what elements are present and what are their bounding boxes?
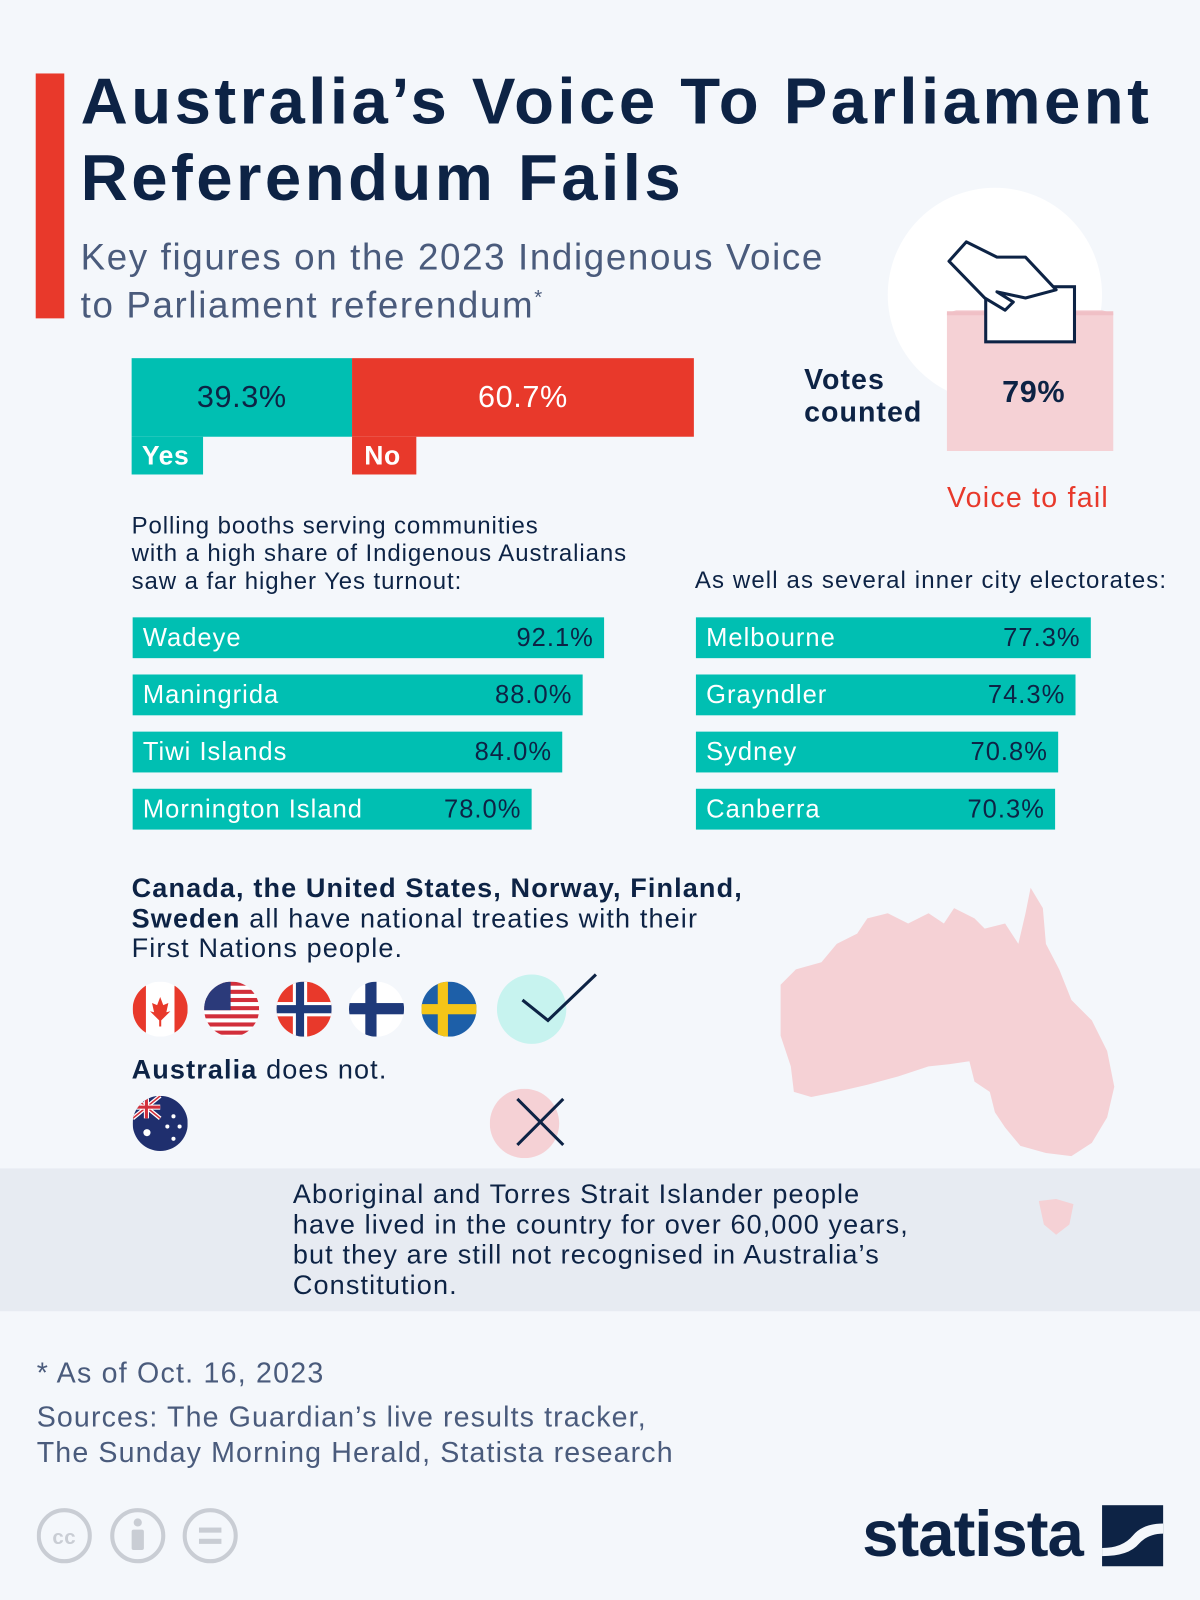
treaties text: Sweden all have national treaties with their <box>132 903 698 933</box>
right bar chart: 74.3% <box>988 681 1065 709</box>
left bar chart: Maningrida <box>143 681 279 709</box>
right bar chart <box>696 617 1091 830</box>
flag: australia <box>132 1096 188 1151</box>
no segment <box>352 358 694 437</box>
right bar chart: Melbourne <box>706 623 836 652</box>
left bar chart: Tiwi Islands <box>143 738 287 766</box>
license icons: cc <box>52 1527 76 1549</box>
sources: The Sunday Morning Herald, Statista research <box>37 1437 674 1468</box>
subtitle: to Parliament referendum* <box>81 284 544 326</box>
ballot box icon <box>946 240 1114 451</box>
polling intro text <box>132 512 627 594</box>
left bar chart: 88.0% <box>495 681 572 709</box>
votes counted label <box>804 363 922 428</box>
left bar chart: Wadeye <box>143 623 242 652</box>
flag: finland <box>349 982 404 1037</box>
yes segment: 39.3% <box>197 381 287 414</box>
tasmania <box>1039 1199 1074 1234</box>
inner city intro text: As well as several inner city electorates: <box>695 566 1167 593</box>
votes counted label: Votes <box>804 363 885 395</box>
sources <box>37 1401 674 1468</box>
sources: Sources: The Guardian’s live results tracker, <box>37 1401 647 1433</box>
left bar chart: 92.1% <box>516 623 594 652</box>
left bar chart: Mornington Island <box>143 795 363 823</box>
left bar chart: 78.0% <box>444 795 521 823</box>
grey band with fact <box>0 1168 1200 1311</box>
footnote: * As of Oct. 16, 2023 <box>37 1357 325 1389</box>
fact text: Constitution. <box>293 1269 458 1299</box>
polling intro text: saw a far higher Yes turnout: <box>132 567 462 594</box>
flag: sweden <box>422 982 476 1037</box>
right bar chart: Canberra <box>706 795 821 823</box>
no segment: 60.7% <box>478 381 568 414</box>
votes counted label: counted <box>804 396 922 428</box>
title: Australia’s Voice To Parliament <box>81 64 1152 138</box>
right bar chart: Grayndler <box>706 681 827 709</box>
fact text <box>293 1179 909 1299</box>
polling intro text: Polling booths serving communities <box>132 512 539 539</box>
check icon <box>497 973 597 1044</box>
flag: usa <box>204 982 260 1036</box>
right bar chart: 70.8% <box>971 738 1048 766</box>
flag: canada <box>132 982 188 1036</box>
treaties text: First Nations people. <box>132 933 403 963</box>
accent bar <box>36 73 64 318</box>
no label: No <box>364 440 401 470</box>
flags row <box>132 982 476 1037</box>
subtitle: Key figures on the 2023 Indigenous Voice <box>81 236 824 278</box>
statista logo: statista <box>862 1497 1083 1570</box>
yes label <box>132 437 203 474</box>
treaties text <box>132 872 743 963</box>
fact text: have lived in the country for over 60,000 years, <box>293 1209 909 1239</box>
license icons <box>36 1508 238 1564</box>
voice to fail: Voice to fail <box>947 482 1109 513</box>
australia text: Australia does not. <box>132 1054 387 1085</box>
title: Referendum Fails <box>81 141 684 214</box>
left bar chart: 84.0% <box>475 738 552 766</box>
polling intro text: with a high share of Indigenous Australians <box>132 540 627 566</box>
white circle background <box>888 188 1102 402</box>
yes/no bar <box>132 358 694 474</box>
australia map <box>780 888 1114 1156</box>
cross icon <box>490 1088 564 1158</box>
yes label: Yes <box>142 440 189 470</box>
no label <box>352 437 416 474</box>
fact text: Aboriginal and Torres Strait Islander people <box>293 1179 860 1209</box>
yes segment <box>132 358 352 437</box>
title <box>81 64 1152 214</box>
flag: norway <box>276 982 332 1037</box>
fact text: but they are still not recognised in Australia’s <box>293 1239 880 1269</box>
right bar chart: Sydney <box>706 738 797 766</box>
treaties text: Canada, the United States, Norway, Finland, <box>132 872 743 903</box>
79% value: 79% <box>1002 376 1065 409</box>
right bar chart: 70.3% <box>967 795 1045 823</box>
left bar chart <box>132 617 604 830</box>
subtitle <box>81 236 824 326</box>
right bar chart: 77.3% <box>1003 623 1081 652</box>
